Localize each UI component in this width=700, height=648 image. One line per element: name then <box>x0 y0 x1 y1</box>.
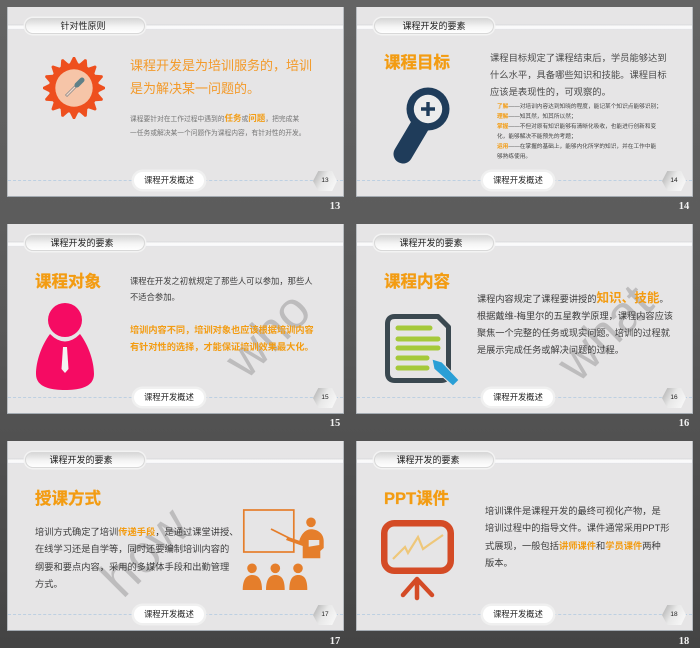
text: supporting explanation <box>130 113 306 137</box>
panel: slide 15 course audience <box>7 224 344 414</box>
heading: slide 14 tab title: 课程开发的要素 <box>402 21 466 31</box>
text: supporting explanation: 一任务或解决某一个问题作为课程内容，有针对性的开发。 <box>130 130 306 137</box>
panel: slide 14 course objectives <box>356 7 693 197</box>
text: main orange statement <box>130 58 312 96</box>
text: objectives description: 应该是表现性的，可观察的。 <box>490 87 611 97</box>
header tab <box>374 235 494 251</box>
page number 18: 18 <box>679 636 689 647</box>
watermark: what: what <box>546 274 664 392</box>
panel: slide 13 targeting principle <box>7 7 344 197</box>
page hexagon: 13 <box>321 177 329 184</box>
heading: course audience: 课程对象 <box>35 273 101 291</box>
footer label <box>134 606 204 623</box>
heading: slide 15 tab title: 课程开发的要素 <box>50 238 114 248</box>
page number 14: 14 <box>679 201 689 212</box>
heading: course content: 课程内容 <box>384 273 450 291</box>
icon: person with tie <box>36 303 94 390</box>
text: objectives description <box>490 53 667 97</box>
text: content description: 根据戴维-梅里尔的五星教学原理，课程内容应该 <box>477 311 673 321</box>
page hexagon: 18 <box>670 611 678 618</box>
watermark: how: how <box>89 496 201 608</box>
page hexagon <box>313 171 337 191</box>
text: objectives description: 课程目标规定了课程结束后，学员能够达到 <box>490 53 667 63</box>
text: four levels list: 掌握——不但对原有知识能够有清晰化吸收，也能进行创新和变 <box>497 124 656 130</box>
text: audience description: 不适合参加。 <box>130 292 180 302</box>
text: four levels list: 了解——对培训内容达到知晓的程度，能记某个知识点能够识别； <box>497 104 662 110</box>
header tab <box>25 18 145 34</box>
page hexagon: 16 <box>670 394 678 401</box>
footer label <box>483 606 553 623</box>
header tab <box>25 452 145 468</box>
footer label: 课程开发概述 <box>144 392 194 402</box>
heading: course objectives: 课程目标 <box>384 54 450 72</box>
text: audience description: 课程在开发之初就规定了那些人可以参加，那些人 <box>130 276 313 286</box>
footer label <box>134 172 204 189</box>
text: content description: 课程内容规定了课程要讲授的知识、技能。 <box>477 291 669 305</box>
text: content description: 是展示完成任务或解决问题的过程。 <box>477 345 624 355</box>
text: four levels list: 理解——知其然，知其所以然； <box>497 114 577 120</box>
text: methods description: 方式。 <box>35 579 63 589</box>
heading: slide 13 tab title: 针对性原则 <box>60 21 106 31</box>
heading: PPT courseware: PPT课件 <box>384 490 449 508</box>
text: orange emphasis: 有针对性的选择，才能保证培训效果最大化。 <box>130 342 314 352</box>
icon: document with pencil <box>385 314 458 386</box>
footer label: 课程开发概述 <box>144 609 194 619</box>
text: content description <box>477 291 673 355</box>
text: four levels list: 运用——在掌握的基础上，能够内化所学的知识，并在工作中能 <box>497 144 656 150</box>
page hexagon <box>662 388 686 408</box>
text: courseware description <box>485 506 670 568</box>
footer label: 课程开发概述 <box>493 609 543 619</box>
panel: slide 18 PPT courseware <box>356 441 693 631</box>
heading: slide 18 tab title: 课程开发的要素 <box>396 455 460 465</box>
page hexagon <box>662 171 686 191</box>
header tab <box>25 235 145 251</box>
text: methods description <box>35 527 238 589</box>
page hexagon <box>313 388 337 408</box>
icon: magnifying glass <box>394 88 450 164</box>
footer label <box>134 389 204 406</box>
footer label: 课程开发概述 <box>144 175 194 185</box>
text: methods description: 纲要和要点内容，采用的多媒体手段和出勤管理 <box>35 562 229 572</box>
heading: slide 16 tab title: 课程开发的要素 <box>399 238 462 248</box>
page number 17: 17 <box>330 636 340 647</box>
page hexagon: 17 <box>321 611 329 618</box>
text: content description: 聚焦一个完整的任务或现实问题。培训的过程就 <box>477 328 670 338</box>
page number 15: 15 <box>330 418 340 429</box>
text: orange emphasis: 培训内容不同，培训对象也应该根据培训内容 <box>130 325 314 335</box>
icon: presentation screen with rising chart <box>381 520 454 600</box>
text: main orange statement: 是为解决某一问题的。 <box>130 81 260 96</box>
footer label: 课程开发概述 <box>493 175 543 185</box>
footer label: 课程开发概述 <box>493 392 543 402</box>
footer label <box>483 389 553 406</box>
icon: orange gear with dropper <box>43 57 105 119</box>
text: four levels list: 够熟练使用。 <box>497 154 531 160</box>
icon: presenter at board with audience <box>242 509 324 590</box>
page hexagon: 14 <box>670 177 678 184</box>
text: audience description <box>130 276 313 302</box>
panel: slide 16 course content <box>356 224 693 414</box>
page hexagon <box>313 605 337 625</box>
heading: slide 17 tab title: 课程开发的要素 <box>49 455 112 465</box>
text: methods description: 在线学习还是自学等，同时还要编制培训内容的 <box>35 544 229 554</box>
text: courseware description: 版本。 <box>485 558 513 568</box>
page number 13: 13 <box>330 201 340 212</box>
page number 16: 16 <box>679 418 689 429</box>
text: objectives description: 什么水平，具备哪些知识和技能。课程目标 <box>490 70 667 80</box>
text: four levels list: 化，能够解决不能预先的考题； <box>497 134 577 140</box>
watermark: who: who <box>214 281 322 389</box>
panel: slide 17 teaching methods <box>7 441 344 631</box>
header tab <box>374 452 494 468</box>
text: four levels list <box>497 103 662 160</box>
text: methods description: 培训方式确定了培训传递手段，是通过课堂讲授、 <box>35 527 238 537</box>
text: courseware description: 培训课件是课程开发的最终可视化产物，是 <box>485 506 661 516</box>
text: supporting explanation: 课程要针对在工作过程中遇到的任务或问题，把完成某 <box>130 113 299 123</box>
page hexagon <box>662 605 686 625</box>
heading: teaching methods: 授课方式 <box>35 490 101 508</box>
text: courseware description: 培训过程中的指导文件。课件通常采用PPT形 <box>485 523 670 533</box>
footer label <box>483 172 553 189</box>
text: courseware description: 式展现，一般包括讲师课件和学员课件两种 <box>485 541 661 551</box>
text: orange emphasis <box>130 324 314 352</box>
text: main orange statement: 课程开发是为培训服务的，培训 <box>130 58 312 73</box>
header tab <box>374 18 494 34</box>
page hexagon: 15 <box>321 394 329 401</box>
